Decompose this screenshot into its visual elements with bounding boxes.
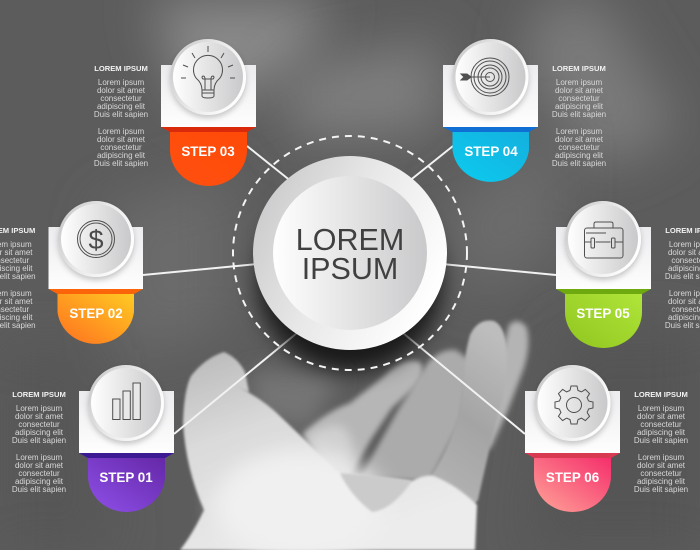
- icon: bar chart: [113, 383, 140, 420]
- text block: step 03: Lorem ipsum: [98, 127, 144, 136]
- panel: step 03: [161, 39, 256, 186]
- text block: step 04: adipiscing elit: [555, 102, 604, 111]
- text block: step 06: [634, 390, 688, 494]
- text block: step 05: [665, 226, 700, 330]
- back little finger: [478, 321, 528, 450]
- text block: step 03: dolor sit amet: [97, 135, 146, 144]
- text block: step 06: consectetur: [640, 469, 682, 478]
- step label: STEP 06: [546, 470, 599, 485]
- text block: step 01: LOREM IPSUM: [12, 390, 66, 399]
- blurred index finger: [303, 361, 423, 476]
- icon: dollar coin: [78, 220, 114, 258]
- panel: step 01: [79, 365, 174, 512]
- central hub: IPSUM: [302, 252, 398, 286]
- text block: step 04: Duis elit sapien: [552, 159, 606, 168]
- dashed ring: [233, 136, 467, 370]
- text block: step 06: dolor sit amet: [637, 461, 686, 470]
- text block: step 01: adipiscing elit: [15, 477, 64, 486]
- icon: briefcase: [584, 222, 623, 258]
- step label: STEP 02: [69, 306, 123, 321]
- text block: step 04: dolor sit amet: [555, 86, 604, 95]
- text block: step 01: Lorem ipsum: [16, 404, 62, 413]
- text block: step 03: consectetur: [100, 94, 142, 103]
- text block: step 03: LOREM IPSUM: [94, 64, 148, 73]
- text block: step 01: consectetur: [18, 469, 60, 478]
- text block: step 01: consectetur: [18, 420, 60, 429]
- text block: step 06: consectetur: [640, 420, 682, 429]
- central hub: [253, 156, 447, 350]
- text block: step 04: consectetur: [558, 143, 600, 152]
- text block: step 03: dolor sit amet: [97, 86, 146, 95]
- text block: step 06: Duis elit sapien: [634, 436, 688, 445]
- text block: step 04: Lorem ipsum: [556, 127, 602, 136]
- icon: gear: [555, 386, 593, 424]
- panel: step 02: [48, 201, 143, 344]
- text block: step 06: Lorem ipsum: [638, 453, 684, 462]
- icon: target with arrow: [461, 58, 509, 96]
- text block: step 03: consectetur: [100, 143, 142, 152]
- connector lines: [143, 146, 556, 434]
- main finger: [428, 321, 507, 512]
- step label: STEP 05: [576, 306, 630, 321]
- palm and thumb: [180, 352, 477, 550]
- text block: step 03: Duis elit sapien: [94, 159, 148, 168]
- text block: step 03: Duis elit sapien: [94, 110, 148, 119]
- text block: step 03: adipiscing elit: [97, 151, 146, 160]
- index finger knuckle: [307, 425, 353, 468]
- text block: step 04: LOREM IPSUM: [552, 64, 606, 73]
- panel: step 05: [556, 201, 651, 348]
- text block: step 01: Duis elit sapien: [12, 436, 66, 445]
- text block: step 03: adipiscing elit: [97, 102, 146, 111]
- central shadow: [258, 188, 442, 372]
- text block: step 01: Lorem ipsum: [16, 453, 62, 462]
- text block: step 04: consectetur: [558, 94, 600, 103]
- step label: STEP 03: [181, 144, 235, 159]
- step label: STEP 04: [464, 144, 518, 159]
- photo: open hand: [180, 321, 528, 550]
- step label: STEP 01: [99, 470, 153, 485]
- hub title: LOREM: [296, 223, 404, 257]
- text block: step 03: Lorem ipsum: [98, 78, 144, 87]
- palm crease: [340, 473, 412, 512]
- text block: step 06: adipiscing elit: [637, 477, 686, 486]
- text block: step 04: dolor sit amet: [555, 135, 604, 144]
- text block: step 06: LOREM IPSUM: [634, 390, 688, 399]
- text block: step 01: dolor sit amet: [15, 461, 64, 470]
- palm highlight: [215, 450, 385, 550]
- text block: step 06: Duis elit sapien: [634, 485, 688, 494]
- panel: step 04: [443, 39, 538, 182]
- text block: step 06: dolor sit amet: [637, 412, 686, 421]
- blurred ring finger: [360, 350, 470, 482]
- text block: step 01: Duis elit sapien: [12, 485, 66, 494]
- text block: step 06: adipiscing elit: [637, 428, 686, 437]
- text block: step 02: [0, 226, 36, 330]
- text block: step 04: [552, 64, 606, 168]
- text block: step 06: Lorem ipsum: [638, 404, 684, 413]
- text block: step 01: dolor sit amet: [15, 412, 64, 421]
- text block: step 01: [12, 390, 66, 494]
- text block: step 03: [94, 64, 148, 168]
- icon: light bulb: [181, 46, 235, 98]
- text block: step 04: Duis elit sapien: [552, 110, 606, 119]
- icon: dollar coin: $: [88, 225, 104, 255]
- text block: step 04: adipiscing elit: [555, 151, 604, 160]
- panel: step 06: [525, 365, 620, 512]
- text block: step 04: Lorem ipsum: [556, 78, 602, 87]
- text block: step 01: adipiscing elit: [15, 428, 64, 437]
